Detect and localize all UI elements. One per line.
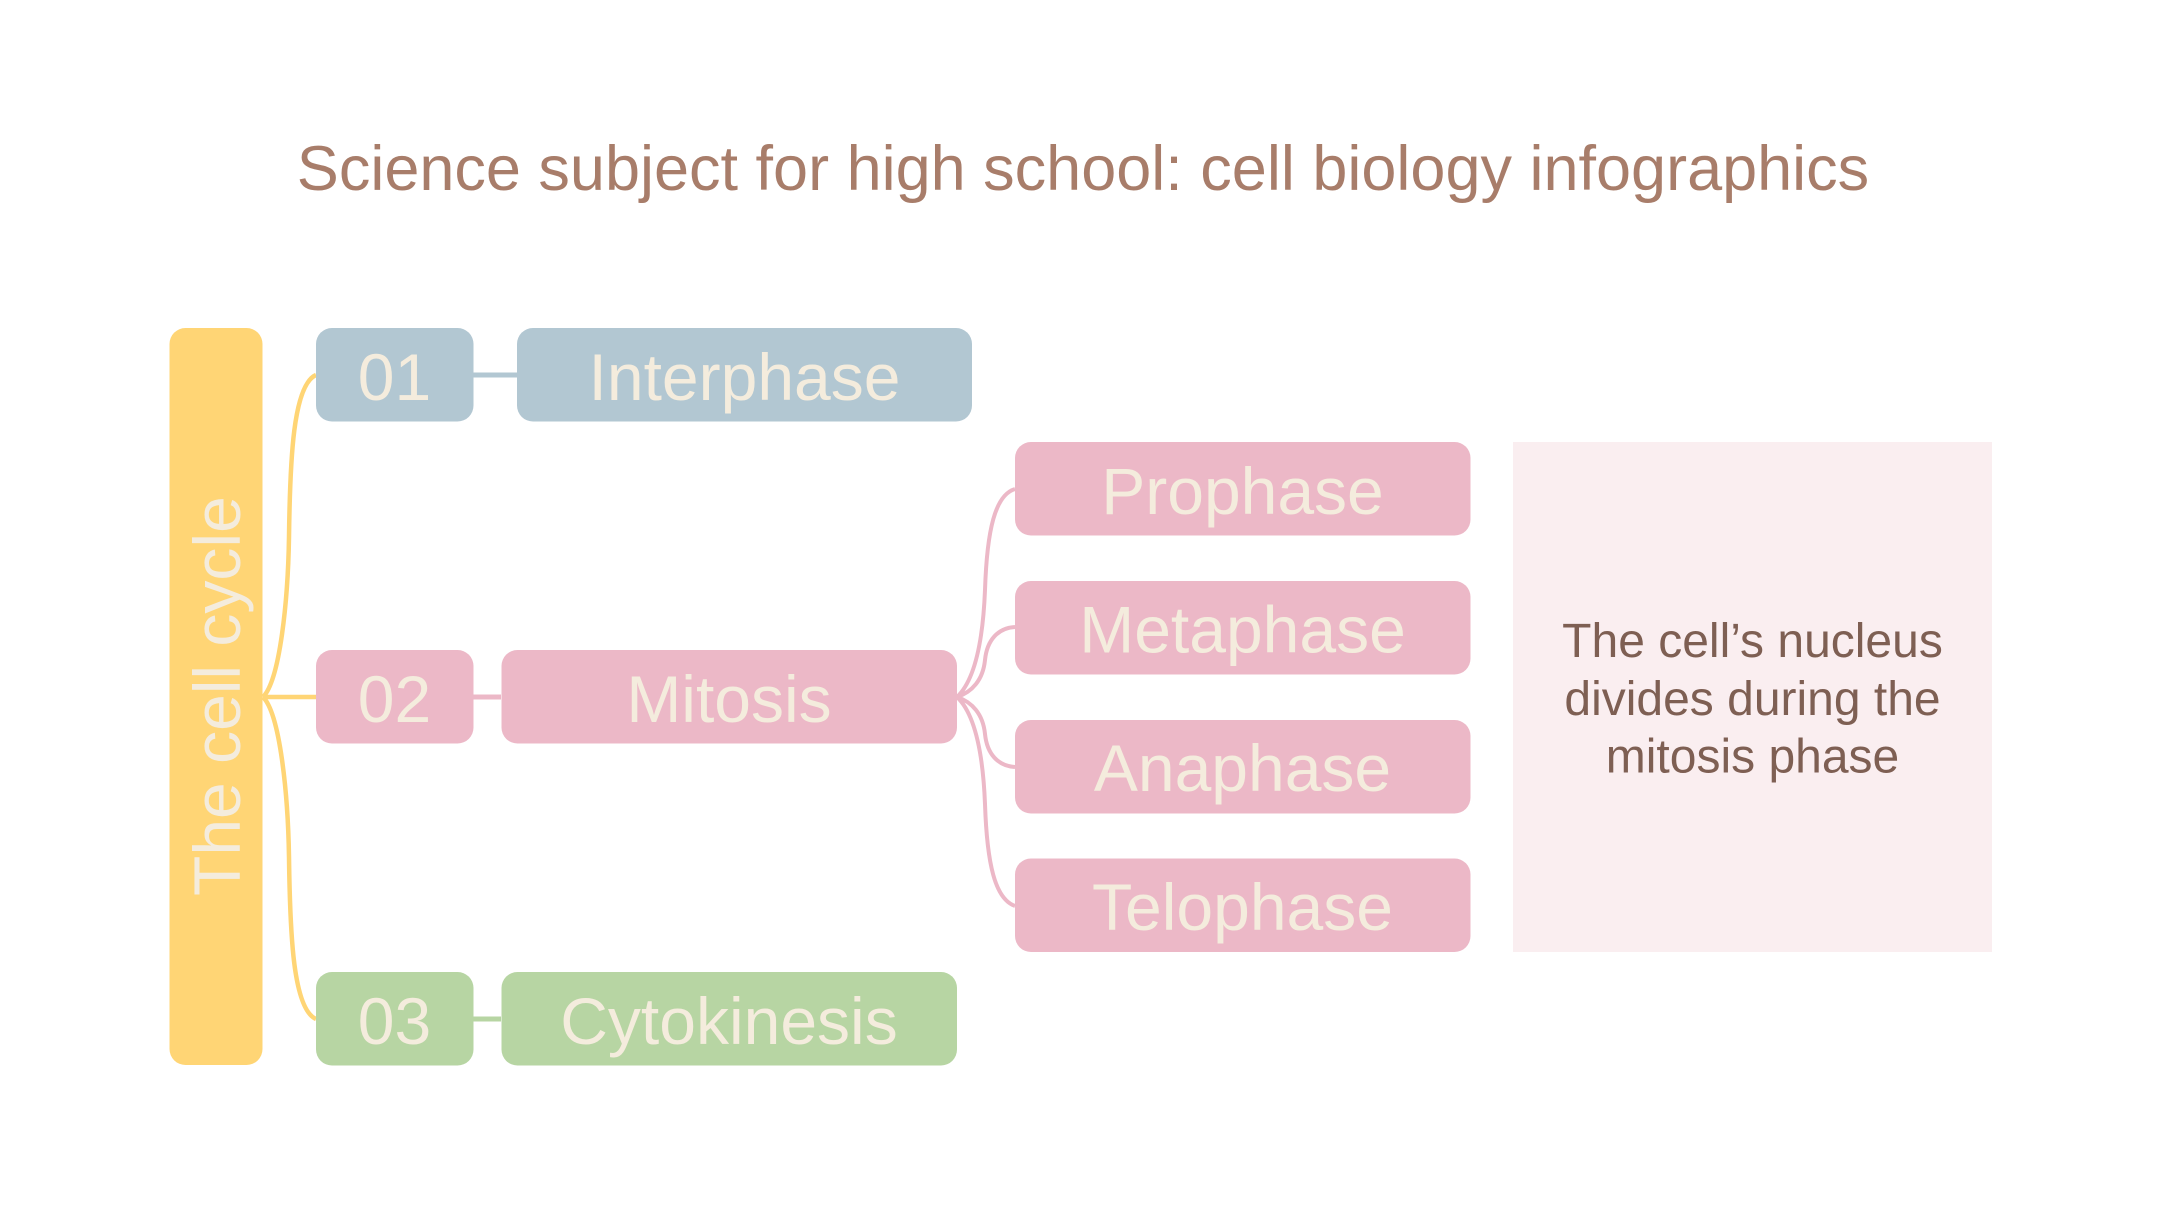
panel: the cell cycle bar bbox=[170, 328, 262, 1065]
box: Anaphase bbox=[1015, 720, 1470, 814]
short connector lines bbox=[473, 375, 517, 1019]
box: Mitosis: Mitosis bbox=[626, 662, 832, 736]
connectors: cell cycle to phases bbox=[263, 375, 316, 1019]
panel: the cell cycle bar: The cell cycle bbox=[180, 496, 254, 896]
description text: divides during the bbox=[1564, 673, 1941, 726]
box: 01 bbox=[316, 328, 474, 422]
description text: mitosis phase bbox=[1606, 730, 1899, 784]
title: Science subject for high school: cell biology infographics bbox=[297, 134, 1869, 204]
box: Interphase bbox=[517, 328, 972, 422]
box: Anaphase: Anaphase bbox=[1094, 731, 1391, 805]
box: Prophase bbox=[1015, 442, 1470, 536]
box: Metaphase bbox=[1015, 581, 1470, 674]
box: 02 bbox=[316, 650, 474, 744]
description text bbox=[1562, 615, 1943, 784]
panel: mitosis description bbox=[1513, 442, 1992, 952]
box: Interphase: Interphase bbox=[589, 340, 900, 414]
box: Mitosis bbox=[502, 650, 957, 744]
box: Telophase bbox=[1015, 858, 1470, 952]
box: 03 bbox=[316, 972, 474, 1066]
connectors: mitosis to sub-phases bbox=[957, 489, 1015, 906]
box: 03: 03 bbox=[358, 984, 431, 1058]
box: Telophase: Telophase bbox=[1092, 870, 1393, 944]
box: Metaphase: Metaphase bbox=[1079, 592, 1406, 666]
box: 01: 01 bbox=[358, 340, 431, 414]
box: Cytokinesis bbox=[502, 972, 957, 1066]
description text: The cell’s nucleus bbox=[1562, 615, 1943, 668]
box: 02: 02 bbox=[358, 662, 431, 736]
box: Prophase: Prophase bbox=[1101, 454, 1384, 528]
box: Cytokinesis: Cytokinesis bbox=[560, 984, 898, 1058]
